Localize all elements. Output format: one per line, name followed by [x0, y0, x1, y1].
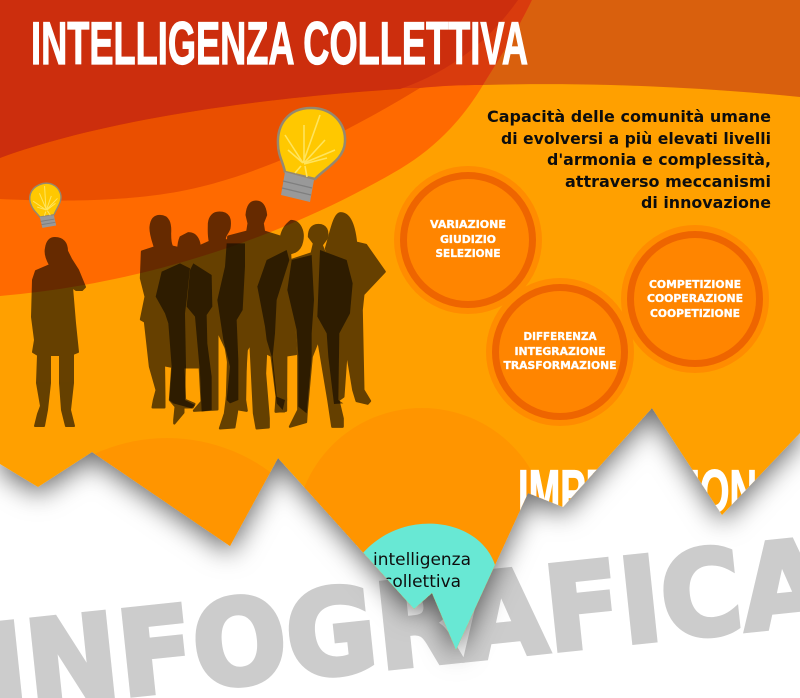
circle: variazione giudizio selezione: VARIAZIONE: [430, 218, 506, 231]
circle: competizione cooperazione coopetizione: [621, 225, 769, 373]
description text: attraverso meccanismi: [565, 172, 771, 191]
circle: competizione cooperazione coopetizione: COOPERAZIONE: [647, 292, 743, 305]
circle: variazione giudizio selezione: GIUDIZIO: [440, 233, 496, 246]
pin label: collettiva: [383, 572, 461, 591]
top-right dark band: [470, 0, 800, 97]
circle: differenza integrazione trasformazione: DIFFERENZA: [524, 330, 597, 343]
darker overlap regions: [156, 243, 353, 413]
lower darker arc left: [94, 438, 270, 546]
icon: small light bulb: [29, 182, 62, 228]
silhouette group: eight people: [141, 202, 385, 428]
icon: large light bulb: [278, 108, 345, 202]
teal pin: [363, 524, 495, 650]
description text: di evolversi a più elevati livelli: [501, 129, 771, 148]
merged light silhouettes: [141, 202, 385, 428]
circle: differenza integrazione trasformazione: TRASFORMAZIONE: [504, 359, 616, 372]
pin label: [374, 552, 470, 587]
dark wedge near top: [403, 0, 532, 88]
circle: differenza integrazione trasformazione: [486, 278, 634, 426]
circle: variazione giudizio selezione: SELEZIONE: [436, 247, 500, 260]
circle: competizione cooperazione coopetizione: COMPETIZIONE: [649, 278, 741, 291]
circle: competizione cooperazione coopetizione: COOPETIZIONE: [650, 307, 740, 320]
silhouette: woman on the phone: [32, 238, 85, 426]
mid orange wave: [0, 88, 420, 200]
description text: [487, 107, 771, 212]
lower darker arc centre: [295, 408, 549, 662]
pin label: intelligenza: [373, 550, 471, 569]
circle: variazione giudizio selezione: [394, 166, 542, 314]
description text: d'armonia e complessità,: [547, 150, 771, 169]
circle: differenza integrazione trasformazione: INTEGRAZIONE: [514, 345, 606, 358]
bright orange wave: [0, 0, 532, 296]
description text: di innovazione: [641, 193, 771, 212]
description text: Capacità delle comunità umane: [487, 107, 771, 126]
red top wave: [0, 0, 518, 158]
